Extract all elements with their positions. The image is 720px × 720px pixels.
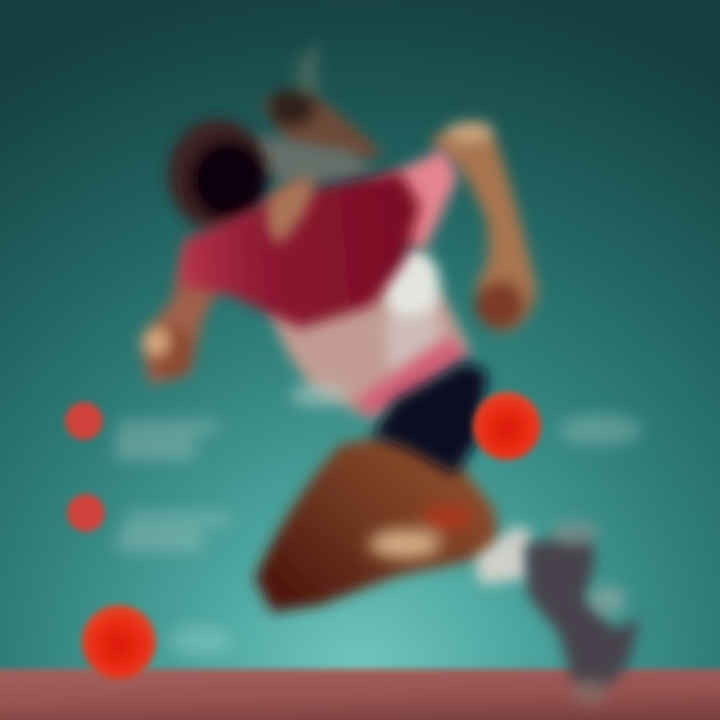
marker: second red circle (67, 494, 105, 532)
front arm (430, 121, 537, 332)
label: third item (168, 625, 232, 655)
thigh (255, 430, 500, 612)
marker: large red circle (82, 605, 156, 679)
head and dark hair (168, 119, 268, 231)
athlete figure (140, 42, 640, 704)
red shirt (180, 172, 420, 328)
raised ponytail (262, 42, 385, 165)
white waist (268, 249, 470, 420)
grey hair band (250, 135, 375, 185)
running track (0, 669, 720, 720)
white sock (475, 526, 530, 585)
marker: first red circle (65, 402, 103, 440)
label: first item (115, 420, 218, 460)
grey shoes (525, 520, 640, 704)
marker: hip red circle (473, 392, 541, 460)
back arm (140, 240, 225, 385)
label: hip (558, 414, 642, 446)
navy shorts (372, 362, 488, 475)
pink shoulder (370, 148, 458, 250)
neck and shoulder skin (266, 178, 315, 245)
knee highlights (369, 504, 473, 559)
label: second item (118, 512, 230, 552)
